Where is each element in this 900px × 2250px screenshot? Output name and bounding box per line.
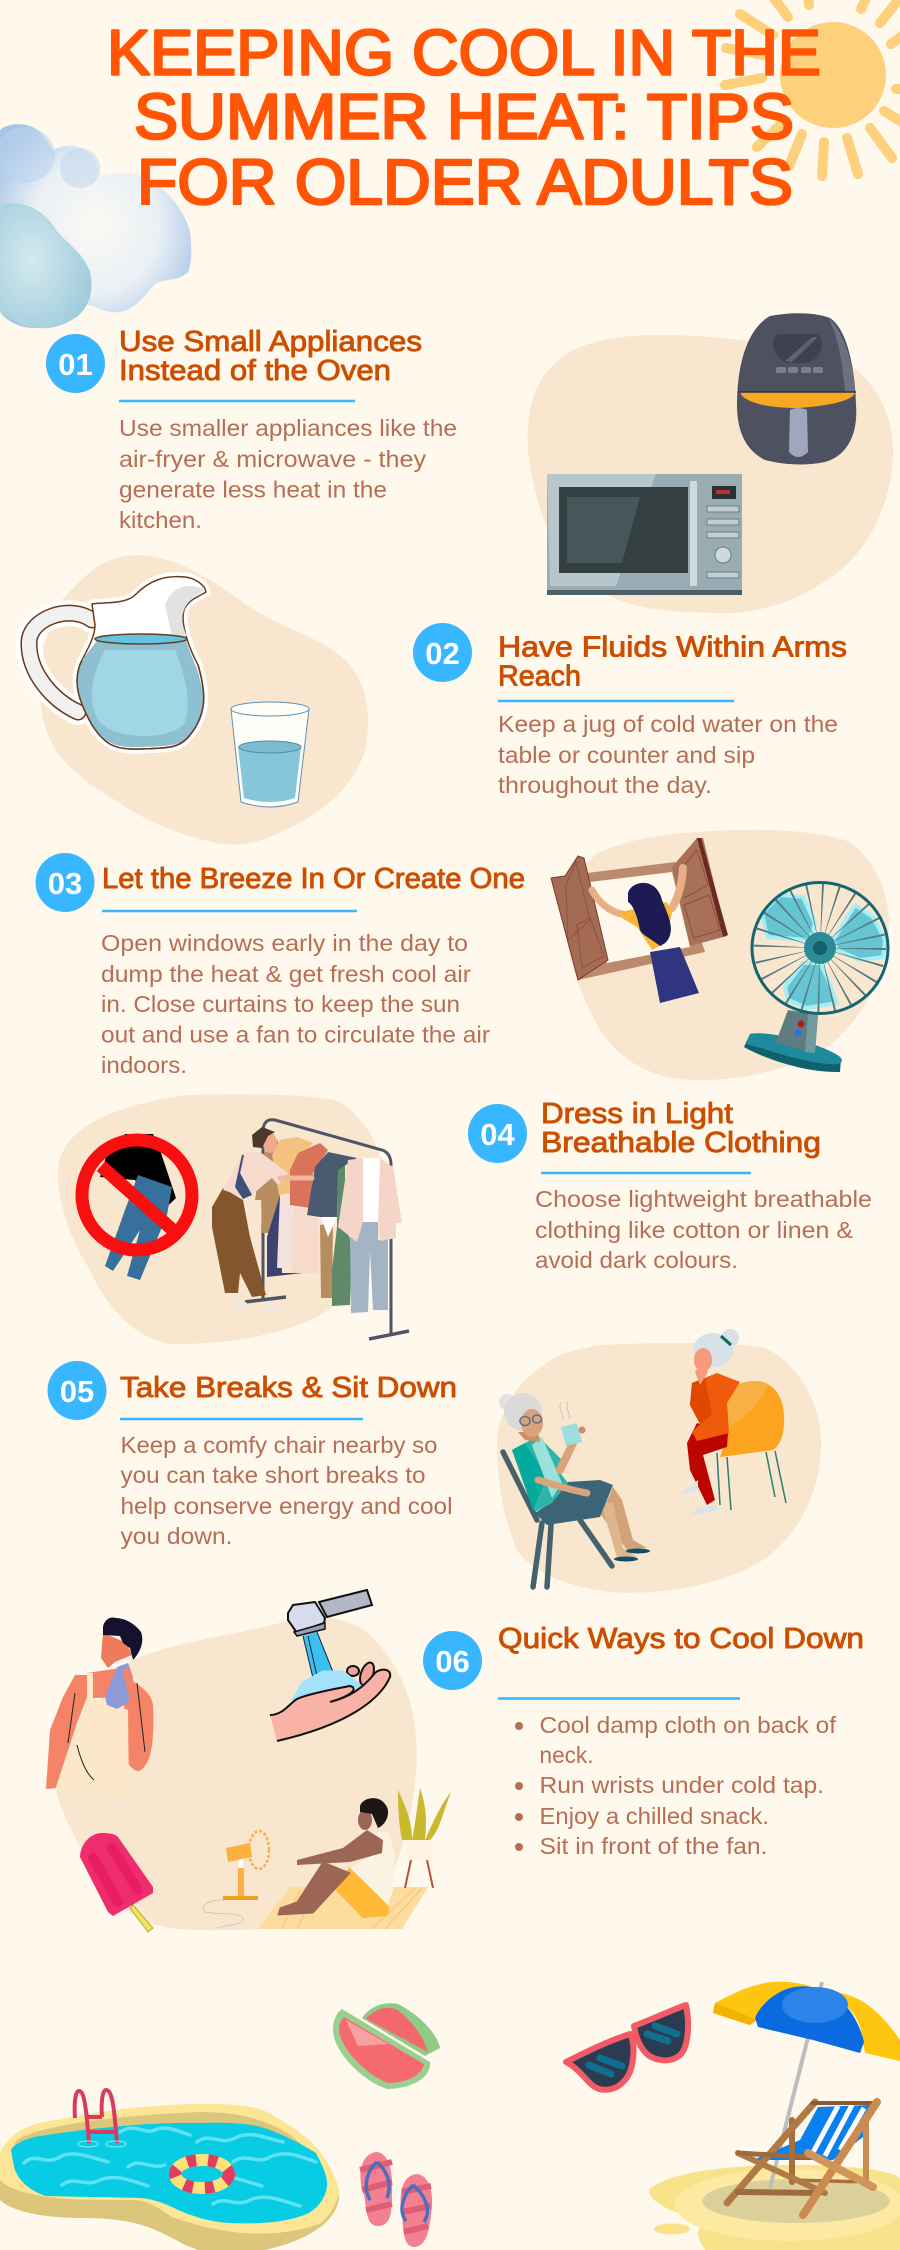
- body text 02: [498, 711, 838, 798]
- heading 04: Dress in Light: [541, 1098, 733, 1130]
- body text 01: air-fryer & microwave - they: [119, 446, 426, 472]
- panel: tip 2 fluids: [29, 555, 847, 845]
- icon: faucet and hand: [270, 1590, 390, 1741]
- body text 03: dump the heat & get fresh cool air: [101, 961, 471, 987]
- icon: woman opening window: [551, 838, 728, 1003]
- bullet list 06: Sit in front of the fan.: [540, 1833, 768, 1859]
- heading 02: Have Fluids Within Arms: [498, 632, 847, 664]
- title: FOR OLDER ADULTS: [137, 146, 793, 218]
- body text 02: table or counter and sip: [498, 742, 755, 768]
- bullet list 06: neck.: [540, 1742, 594, 1768]
- body text 01: generate less heat in the: [119, 476, 387, 502]
- body text 02: Keep a jug of cold water on the: [498, 711, 838, 737]
- body text 05: you down.: [120, 1523, 232, 1549]
- illustration backdrop 01: [528, 335, 893, 613]
- heading 01: Use Small Appliances: [119, 326, 422, 358]
- icon: glass of water: [231, 702, 309, 807]
- icon: popsicle: [80, 1833, 153, 1932]
- icon: flip flops: [360, 2152, 432, 2247]
- icon: swimming pool: [0, 2090, 339, 2250]
- icon: person at clothing rack: [212, 1120, 409, 1339]
- number badge 02: [413, 623, 472, 682]
- icon: sunglasses: [566, 2005, 688, 2090]
- number badge 03: 03: [48, 866, 82, 901]
- body text 03: Open windows early in the day to: [101, 930, 468, 956]
- heading 05: Take Breaks & Sit Down: [120, 1372, 457, 1404]
- heading 03: Let the Breeze In Or Create One: [102, 863, 525, 895]
- panel: tip 6 quick ways to cool down: [46, 1590, 864, 1932]
- icon: man with damp cloth: [46, 1617, 153, 1798]
- icon: watercolour cloud: [0, 124, 191, 328]
- icon: sun: [725, 0, 900, 176]
- panel: tip 5 breaks: [48, 1329, 821, 1593]
- body text 02: throughout the day.: [498, 772, 712, 798]
- number badge 02: 02: [425, 636, 460, 671]
- number badge 06: 06: [435, 1644, 470, 1679]
- icon: person sitting by small fan: [203, 1788, 451, 1929]
- body text 04: clothing like cotton or linen &: [535, 1217, 853, 1243]
- body text 05: help conserve energy and cool: [120, 1493, 453, 1519]
- heading 02: [498, 632, 847, 692]
- heading 01: Instead of the Oven: [119, 355, 391, 387]
- panel: tip 4 clothing: [58, 1094, 872, 1344]
- icon: microwave: [547, 474, 742, 595]
- icon: woman on dark chair with mug: [499, 1393, 650, 1587]
- panel: tip 1 small appliances: [46, 313, 893, 613]
- heading 04: [541, 1098, 821, 1159]
- body text 05: [120, 1432, 453, 1549]
- number badge 01: 01: [58, 347, 93, 382]
- number badge 03: [36, 853, 94, 912]
- icon: water jug: [29, 577, 206, 749]
- illustration backdrop 03: [565, 830, 889, 1080]
- body text 03: in. Close curtains to keep the sun: [101, 991, 460, 1017]
- heading 02: Reach: [498, 660, 581, 692]
- bullet list 06: Run wrists under cold tap.: [540, 1772, 824, 1798]
- body text 01: kitchen.: [119, 507, 202, 533]
- number badge 01: [46, 334, 105, 393]
- icon: deck chair: [727, 2102, 877, 2215]
- body text 04: avoid dark colours.: [535, 1247, 738, 1273]
- bullet list 06: Enjoy a chilled snack.: [540, 1803, 769, 1829]
- title: KEEPING COOL IN THE: [107, 16, 821, 88]
- icon: beach sand: [649, 2165, 900, 2250]
- number badge 04: 04: [480, 1117, 515, 1152]
- number badge 05: 05: [60, 1374, 94, 1409]
- number badge 04: [468, 1104, 527, 1163]
- body text 03: out and use a fan to circulate the air: [101, 1022, 490, 1048]
- body text 04: [535, 1186, 872, 1273]
- heading 06: Quick Ways to Cool Down: [498, 1623, 864, 1655]
- body text 03: [101, 930, 490, 1078]
- number badge 06: [423, 1631, 482, 1690]
- illustration backdrop 02: [40, 555, 368, 845]
- bullet list 06: Cool damp cloth on back of: [540, 1712, 836, 1738]
- icon: desk fan: [744, 882, 888, 1072]
- body text 05: you can take short breaks to: [120, 1462, 426, 1488]
- body text 05: Keep a comfy chair nearby so: [120, 1432, 438, 1458]
- icon: watermelon: [333, 2003, 440, 2089]
- panel: tip 3 breeze: [36, 830, 889, 1080]
- illustration backdrop 04: [58, 1094, 386, 1344]
- title: SUMMER HEAT: TIPS: [134, 80, 794, 152]
- illustration backdrop 06: [56, 1616, 417, 1930]
- icon: woman on orange chair: [676, 1329, 786, 1516]
- illustration backdrop 05: [497, 1343, 821, 1593]
- body text 03: indoors.: [101, 1052, 187, 1078]
- icon: no dark clothing sign: [82, 1134, 192, 1280]
- body text 01: Use smaller appliances like the: [119, 415, 457, 441]
- icon: beach umbrella: [713, 1982, 900, 2188]
- number badge 05: [48, 1361, 106, 1420]
- heading 04: Breathable Clothing: [541, 1127, 821, 1159]
- title: [107, 16, 821, 218]
- body text 04: Choose lightweight breathable: [535, 1186, 872, 1212]
- heading 01: [119, 326, 422, 387]
- bullet list 06: [515, 1712, 836, 1859]
- body text 01: [119, 415, 457, 533]
- icon: air fryer: [737, 313, 856, 464]
